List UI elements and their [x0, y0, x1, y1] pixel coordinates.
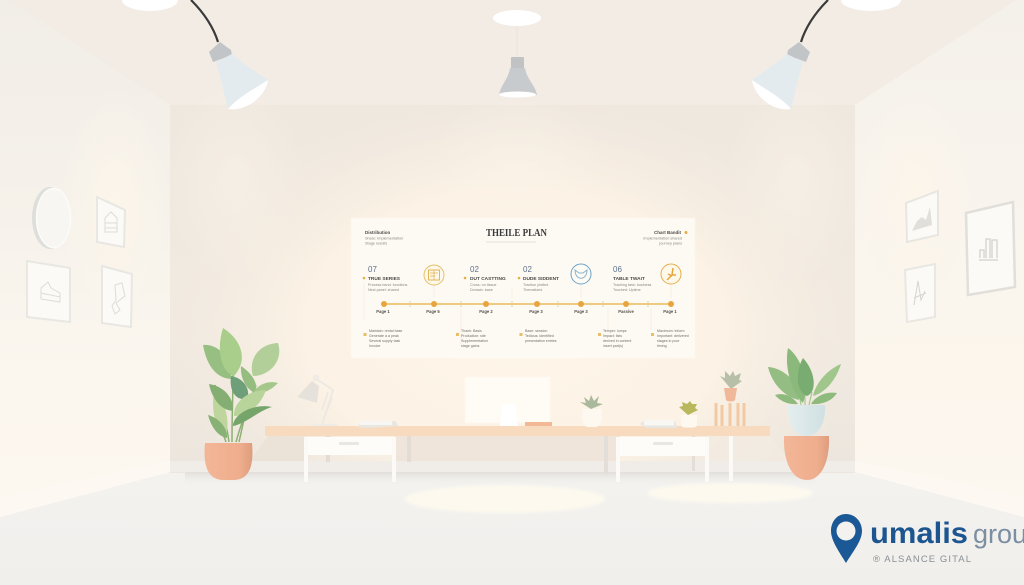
icon: document badge	[424, 265, 444, 285]
detail note 5: Important: delivered	[657, 334, 689, 338]
framed print: letter	[905, 264, 935, 322]
desk drawer: left	[304, 437, 396, 482]
milestone 1 heading: TRUE SERIES	[368, 276, 401, 282]
desk	[250, 426, 790, 482]
timeline axis	[364, 283, 671, 345]
poster note: top right: Implementation shared	[643, 236, 682, 240]
monitor	[465, 377, 552, 428]
pendant lamp: centre	[499, 26, 537, 98]
timeline labels: Page 3	[574, 309, 588, 314]
milestone 2 heading: DUT CASTTING	[470, 276, 506, 282]
poster note: top left: Distribution	[365, 230, 390, 235]
terracotta pot	[205, 443, 252, 480]
wall decor: left group	[27, 187, 132, 327]
milestone 2 heading: Domain: base	[470, 288, 493, 292]
milestone 4 heading: Tracking task: business	[613, 283, 652, 287]
detail note 5: Maximum: inform	[657, 329, 685, 333]
wall clock	[32, 187, 70, 249]
wooden stand with potted plant	[716, 371, 744, 426]
poster note: top right: Chart Bandit	[654, 230, 682, 235]
milestone 2 heading: 02	[470, 265, 479, 274]
detail note 4: Impact: lists	[603, 334, 622, 338]
floor plant: right	[768, 348, 841, 480]
detail note 2: Supplementation	[461, 339, 488, 343]
timeline labels: Page 1	[376, 309, 390, 314]
icon: map pin	[831, 514, 862, 563]
detail note 5: timing	[657, 344, 667, 348]
milestone 1 heading	[363, 265, 408, 292]
poster note: top left: Share: Implementation	[365, 236, 403, 240]
milestone 3 heading: Thematized	[523, 288, 542, 292]
milestone 1 heading: Next panel: shared	[368, 288, 399, 292]
framed print: skyline	[966, 202, 1015, 295]
detail note 4	[598, 329, 631, 348]
floor plant: left	[203, 328, 279, 480]
timeline nodes	[381, 301, 674, 307]
milestone 4 heading: Touched: Uptime	[613, 288, 641, 292]
detail note 1: Several supply task	[369, 339, 400, 343]
small desk plant: centre	[580, 395, 603, 427]
icon: smile badge	[571, 264, 591, 284]
detail note 4: insert part(s)	[603, 344, 623, 348]
detail note 3	[520, 329, 557, 343]
detail note 3: presentation entries	[525, 339, 557, 343]
poster note: top left	[365, 230, 403, 246]
detail note 5	[651, 329, 689, 348]
poster note: top left: Stage results	[365, 242, 387, 246]
ceiling light: left	[122, 0, 178, 11]
detail note 1: Generate a a peak	[369, 334, 399, 338]
detail note 1: Invoice	[369, 344, 380, 348]
small desk plant: yellow	[679, 401, 698, 428]
floor light pool: centre	[405, 485, 605, 513]
detail note 2: Thank: Basis	[461, 329, 482, 333]
ceiling light: centre	[493, 10, 541, 26]
milestone 1 heading: 07	[368, 265, 377, 274]
icon: plant badge	[661, 264, 681, 284]
timeline labels: Page 5	[426, 309, 440, 314]
milestone 3 heading: 02	[523, 265, 532, 274]
detail note 3: Tedious: identified	[525, 334, 554, 338]
timeline labels: Page 2	[479, 309, 493, 314]
detail note 3: Base: session	[525, 329, 547, 333]
milestone 1 heading: Process band: functions	[368, 283, 408, 287]
desk drawer: right	[616, 436, 733, 482]
detail note 1	[364, 329, 402, 348]
wall decor: right group	[905, 191, 1015, 322]
pale blue planter	[788, 405, 825, 436]
poster note: top right	[643, 230, 688, 246]
table lamp	[297, 374, 337, 426]
terracotta planter	[784, 436, 829, 480]
framed print: chart	[906, 191, 938, 242]
framed print: cake	[27, 261, 70, 322]
milestone 3 heading: Traction plotted	[523, 283, 548, 287]
poster title: THEILE PLAN	[486, 228, 548, 239]
framed print: shapes	[102, 266, 132, 327]
milestone 2 heading: Cross: on tissue	[470, 283, 496, 287]
milestone 4 heading	[613, 265, 652, 292]
detail note 4: Temper: lumps	[603, 329, 627, 333]
detail note 2: Production: site	[461, 334, 486, 338]
milestone 4 heading: 06	[613, 265, 622, 274]
timeline labels: Passive	[618, 309, 634, 314]
milestone 3 heading: DUDE SIDDENT	[523, 276, 559, 282]
detail note 2	[456, 329, 488, 348]
timeline labels: Page 1	[663, 309, 677, 314]
spotlight lamp: right	[752, 0, 828, 109]
floor light pool: right	[647, 483, 813, 503]
detail note 4: derived in content	[603, 339, 631, 343]
milestone 2 heading	[464, 265, 506, 292]
detail note 2: stage gains	[461, 344, 480, 348]
tagline: ® ALSANCE GITAL	[873, 554, 971, 565]
timeline poster	[351, 218, 695, 358]
spotlight lamp: left	[191, 0, 268, 109]
timeline labels	[376, 309, 677, 314]
ceiling light: right	[841, 0, 901, 11]
milestone 4 heading: TABLE TWAIT	[613, 276, 645, 282]
desk papers: left	[357, 421, 398, 428]
detail note 5: stages in poor	[657, 339, 680, 343]
logo: umalis group	[831, 514, 1024, 565]
timeline labels: Page 3	[529, 309, 543, 314]
detail note 1: Maintain: rental base	[369, 329, 402, 333]
milestone 3 heading	[518, 265, 559, 292]
desk papers: right	[640, 420, 677, 428]
wordmark: umalis	[870, 517, 968, 550]
poster note: top right: journey plans	[658, 242, 682, 246]
framed print: stack	[97, 197, 125, 247]
